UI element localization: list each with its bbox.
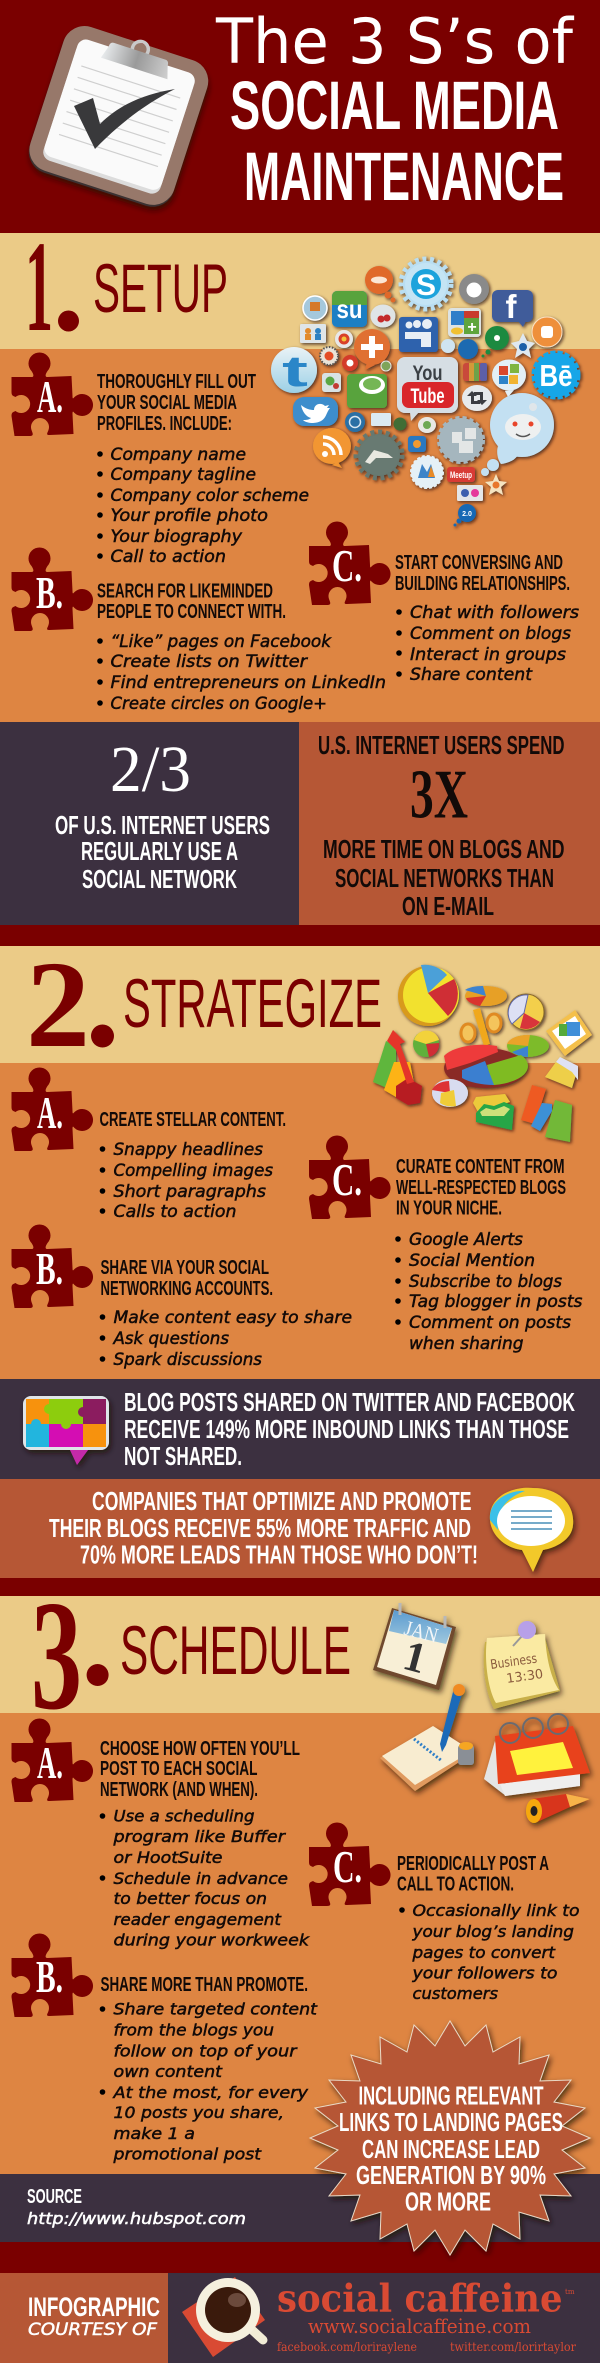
text block 1A: Company tagline <box>110 465 256 485</box>
stat text: NOT SHARED. <box>124 1441 242 1471</box>
text block 1C: Share content <box>410 665 533 685</box>
panel: section 2 heading band <box>0 936 600 1073</box>
text block 3A: CHOOSE HOW OFTEN YOU’LL <box>100 1738 300 1760</box>
puzzle piece 3A <box>12 1718 93 1802</box>
text block 3B: follow on top of your <box>114 2042 298 2060</box>
stat text <box>49 1486 478 1570</box>
heading number 3: 3 <box>31 1568 82 1742</box>
text block 3B: promotional post <box>112 2144 262 2164</box>
puzzle piece 3B <box>12 1933 93 2017</box>
text block 2A: Compelling images <box>114 1161 273 1181</box>
text block 3B: from the blogs you <box>114 2020 274 2040</box>
text block 1A: Company color scheme <box>110 486 309 506</box>
icon: youtube <box>397 357 458 421</box>
panel: footer logo <box>168 2273 600 2363</box>
text block 3A: Schedule in advance <box>114 1869 288 1888</box>
text block 2A: Calls to action <box>114 1202 236 1222</box>
puzzle piece 3C: C. <box>333 1841 362 1892</box>
puzzle piece 3B: B. <box>36 1951 63 2002</box>
logo text: facebook.com/loriraylene <box>277 2340 417 2354</box>
icon: msn <box>411 456 443 488</box>
panel: footer credit <box>0 2273 168 2363</box>
text block 2B: SHARE VIA YOUR SOCIAL <box>100 1257 269 1279</box>
text block 3C: Occasionally link to <box>412 1901 580 1920</box>
panel: statistic 3X: ON E-MAIL <box>402 891 494 921</box>
icon: rainbow bars <box>463 363 487 381</box>
icon: technorati chat <box>347 374 387 408</box>
icon: sticky note: 13:30 <box>505 1667 544 1687</box>
text block 1C <box>395 552 579 685</box>
text block 3A: program like Buffer <box>112 1827 287 1846</box>
heading number 2: 2 <box>26 936 90 1073</box>
icon cluster: social network logos <box>271 261 578 526</box>
icon: google plus: + <box>467 319 477 336</box>
text block 2C: Subscribe to blogs <box>409 1272 562 1292</box>
text block 1B: Find entrepreneurs on LinkedIn <box>110 673 386 693</box>
text block 2C <box>395 1156 583 1354</box>
text block 3B: At the most, for every <box>112 2083 309 2102</box>
icon: flat pie chart <box>465 986 507 1006</box>
text block 1C: Chat with followers <box>410 603 579 623</box>
panel: statistic 3X: 3X <box>410 756 468 834</box>
icon: sticky note: Business <box>489 1652 538 1673</box>
panel: section 2 body <box>0 1063 600 1379</box>
icon: square badge <box>408 436 426 452</box>
panel: footer credit: COURTESY OF <box>28 2320 157 2340</box>
icon: wide pie chart green <box>507 1035 549 1057</box>
icon: big pie chart <box>398 965 459 1026</box>
icon: web 2.0 <box>454 504 476 526</box>
title <box>215 5 575 215</box>
icon: youtube: Tube <box>410 385 444 408</box>
icon: chart clipboard <box>546 1010 592 1056</box>
panel: statistic two thirds: REGULARLY USE A <box>81 836 238 866</box>
text block 2C: IN YOUR NICHE. <box>396 1198 502 1220</box>
heading: strategize: STRATEGIZE <box>123 965 382 1042</box>
text block 2B <box>100 1257 352 1370</box>
icon: colourful speech bubble <box>490 1488 573 1572</box>
text block 3A: during your workweek <box>114 1930 310 1950</box>
panel: source band: SOURCE <box>27 2186 82 2208</box>
panel: section 3 heading band <box>0 1568 600 1742</box>
puzzle piece 1A: A. <box>37 371 63 422</box>
text block 1C: Comment on blogs <box>410 624 571 644</box>
icon: stumbleupon: su <box>336 294 362 324</box>
puzzle piece 2A: A. <box>37 1087 63 1138</box>
icon: behance: Bē <box>540 358 572 393</box>
logo text: www.socialcaffeine.com <box>308 2314 531 2338</box>
text block 2A: CREATE STELLAR CONTENT. <box>100 1109 286 1131</box>
puzzle piece 2C <box>309 1135 391 1219</box>
text block 3A: to better focus on <box>114 1889 267 1908</box>
text block 3B: 10 posts you share, <box>114 2103 284 2122</box>
puzzle piece 1B: B. <box>36 567 63 618</box>
text block 2C: Tag blogger in posts <box>409 1292 583 1312</box>
icon: share <box>482 326 509 358</box>
icon: clipboard with check mark <box>23 18 215 213</box>
icon: plus bubble <box>354 329 390 370</box>
text block 1B: “Like” pages on Facebook <box>110 632 332 652</box>
icon: meetup <box>447 467 475 482</box>
text block 2C: Google Alerts <box>409 1230 523 1250</box>
title: The 3 S’s of <box>215 5 575 78</box>
icon: sticky note <box>484 1621 560 1709</box>
icon: windows <box>492 360 526 397</box>
panel: section 1 body <box>0 349 600 722</box>
text block 1A: THOROUGHLY FILL OUT <box>97 371 256 393</box>
icon: youtube: You <box>412 362 442 385</box>
text block 3C: your blog’s landing <box>411 1922 574 1941</box>
text block 3A: Use a scheduling <box>114 1806 254 1826</box>
logo text: twitter.com/lorirtaylor <box>450 2340 576 2354</box>
icon: geo tag <box>322 373 341 392</box>
icon: retweet <box>462 385 492 411</box>
text block 2B: Make content easy to share <box>114 1308 352 1328</box>
icon: 3D bar chart <box>521 1085 572 1142</box>
text block 3A: POST TO EACH SOCIAL <box>100 1758 258 1780</box>
text block 3C <box>397 1853 580 2003</box>
text block 2A: Snappy headlines <box>114 1140 263 1160</box>
puzzle piece 1A <box>12 352 93 436</box>
panel: section 1 heading band <box>0 215 600 359</box>
icon: deviantart <box>358 434 400 476</box>
icon: notebook with pen <box>380 1684 474 1791</box>
text block 1A <box>97 371 309 567</box>
icon: large 3D pie chart <box>444 1045 528 1088</box>
panel: statistic two thirds: 2/3 <box>110 733 191 806</box>
text block 3C: pages to convert <box>411 1943 556 1962</box>
text block 2B: Ask questions <box>113 1329 229 1349</box>
icon: apple <box>459 274 489 304</box>
icon: coffee cup <box>182 2277 265 2357</box>
text block 3B <box>100 1974 318 2164</box>
icon: grey gear <box>439 418 483 462</box>
icon: twitter round <box>271 347 317 396</box>
icon: white pie chart <box>508 994 544 1030</box>
icon: myspace <box>399 317 438 352</box>
callout: starburst statistic: OR MORE <box>405 2186 491 2216</box>
icon: skype: S <box>416 269 436 302</box>
stat text <box>124 1387 575 1471</box>
icon: skype <box>403 261 449 307</box>
icon: pin <box>335 330 353 348</box>
text block 2B: Spark discussions <box>114 1350 262 1370</box>
icon: blogger <box>532 317 562 347</box>
icon: rss <box>313 428 351 468</box>
logo text: social caffeine <box>277 2276 562 2320</box>
panel: footer credit: INFOGRAPHIC <box>28 2292 160 2322</box>
text block 2C: when sharing <box>409 1334 524 1354</box>
heading: setup: SETUP <box>93 250 228 327</box>
puzzle piece 3C <box>309 1822 391 1906</box>
icon: desk calendar <box>373 1603 456 1690</box>
puzzle piece 2C: C. <box>332 1154 362 1205</box>
panel: source band <box>0 2174 600 2242</box>
icon: soundcloud <box>365 266 396 302</box>
icon: twitter round: t <box>282 347 309 396</box>
puzzle piece 1B <box>12 547 93 631</box>
text block 3A: NETWORK (AND WHEN). <box>100 1779 258 1801</box>
icon: friendfeed <box>300 324 326 343</box>
text block 3B: SHARE MORE THAN PROMOTE. <box>100 1974 308 1996</box>
icon: google plus <box>448 308 481 337</box>
icon: favourite star <box>485 474 507 495</box>
panel: source band: http://www.hubspot.com <box>27 2209 246 2228</box>
text block 2C: Social Mention <box>409 1251 535 1271</box>
puzzle piece 3A: A. <box>37 1737 63 1788</box>
icon: twitter bird <box>293 397 338 426</box>
text block 2C: Comment on posts <box>409 1313 571 1333</box>
text block 1C: Interact in groups <box>410 645 566 665</box>
text block 3B: own content <box>114 2062 223 2081</box>
icon: meetup: Meetup <box>450 470 472 480</box>
text block 1A: Company name <box>110 445 246 465</box>
text block 1B: Create lists on Twitter <box>110 652 308 672</box>
text block 3C: your followers to <box>411 1964 558 1982</box>
icon: facebook: f <box>506 288 518 325</box>
text block 3A: or HootSuite <box>114 1848 223 1867</box>
text block 1A: Your profile photo <box>110 506 268 526</box>
icon: web 2.0: 2.0 <box>462 511 472 518</box>
icon: yellow folder <box>545 1057 578 1088</box>
text block 3B: make 1 a <box>114 2124 195 2143</box>
text block 1A: PROFILES. INCLUDE: <box>97 413 232 435</box>
icon: drupal star <box>511 333 535 358</box>
text block 3C: CALL TO ACTION. <box>397 1874 514 1896</box>
panel: statistic two thirds: SOCIAL NETWORK <box>82 864 237 894</box>
logo text: tm <box>565 2288 575 2296</box>
icon: white pie chart low <box>432 1079 468 1107</box>
icon cluster: 3D charts <box>373 965 592 1142</box>
icon: cherry <box>370 304 396 328</box>
text block 1A: Your biography <box>110 527 243 547</box>
heading: schedule: SCHEDULE <box>120 1612 351 1689</box>
puzzle piece 2B: B. <box>36 1243 63 1294</box>
text block 3B: Share targeted content <box>114 2000 318 2018</box>
callout: starburst statistic <box>310 2021 590 2255</box>
text block 1B <box>97 580 386 714</box>
text block 1A: Call to action <box>110 547 226 567</box>
text block 3A <box>100 1738 310 1950</box>
icon: desk calendar: 1 <box>398 1632 431 1683</box>
icon cluster: calendars and stationery <box>373 1603 590 1823</box>
icon: bar chart with arrow <box>373 1030 422 1105</box>
panel: statistic 3X <box>299 722 600 925</box>
text block 2A <box>100 1109 286 1222</box>
text block 2A: Short paragraphs <box>114 1182 266 1202</box>
icon: pencil <box>526 1794 590 1823</box>
text block 2B: NETWORKING ACCOUNTS. <box>100 1278 273 1300</box>
icon: puzzle speech bubble <box>23 1396 109 1465</box>
puzzle piece 2B <box>12 1224 93 1308</box>
text block 1B: Create circles on Google+ <box>110 694 327 714</box>
puzzle piece 1C <box>309 521 391 605</box>
icon: green folder <box>473 1094 514 1130</box>
text block 3C: customers <box>412 1984 498 2003</box>
text block 1A: YOUR SOCIAL MEDIA <box>97 392 237 414</box>
icon: reddit bubble <box>481 393 554 476</box>
heading number 1: 1 <box>25 215 53 359</box>
icon: desk calendar: JAN <box>402 1616 441 1648</box>
text block 1B: PEOPLE TO CONNECT WITH. <box>97 601 286 623</box>
panel: stat band 55 percent <box>0 1479 600 1578</box>
panel: statistic two thirds: OF U.S. INTERNET USERS <box>55 810 270 840</box>
icon: percent sign <box>461 1008 501 1046</box>
icon: behance <box>534 353 578 397</box>
panel: statistic two thirds <box>0 722 299 925</box>
panel: section 3 body <box>0 1713 600 2174</box>
text block 3A: reader engagement <box>114 1910 282 1929</box>
icon: tent calendar <box>484 1714 590 1796</box>
logo text <box>277 2276 576 2354</box>
text block 1B: SEARCH FOR LIKEMINDED <box>97 580 273 602</box>
icon: people badge <box>303 296 327 320</box>
puzzle piece 2A <box>12 1067 93 1151</box>
puzzle piece 1C: C. <box>332 540 362 591</box>
icon: flickr <box>457 485 483 501</box>
panel: header <box>0 0 600 233</box>
icon: small pie chart <box>413 1031 439 1057</box>
icon: facebook <box>492 288 533 327</box>
panel: stat band 149 percent <box>0 1379 600 1479</box>
